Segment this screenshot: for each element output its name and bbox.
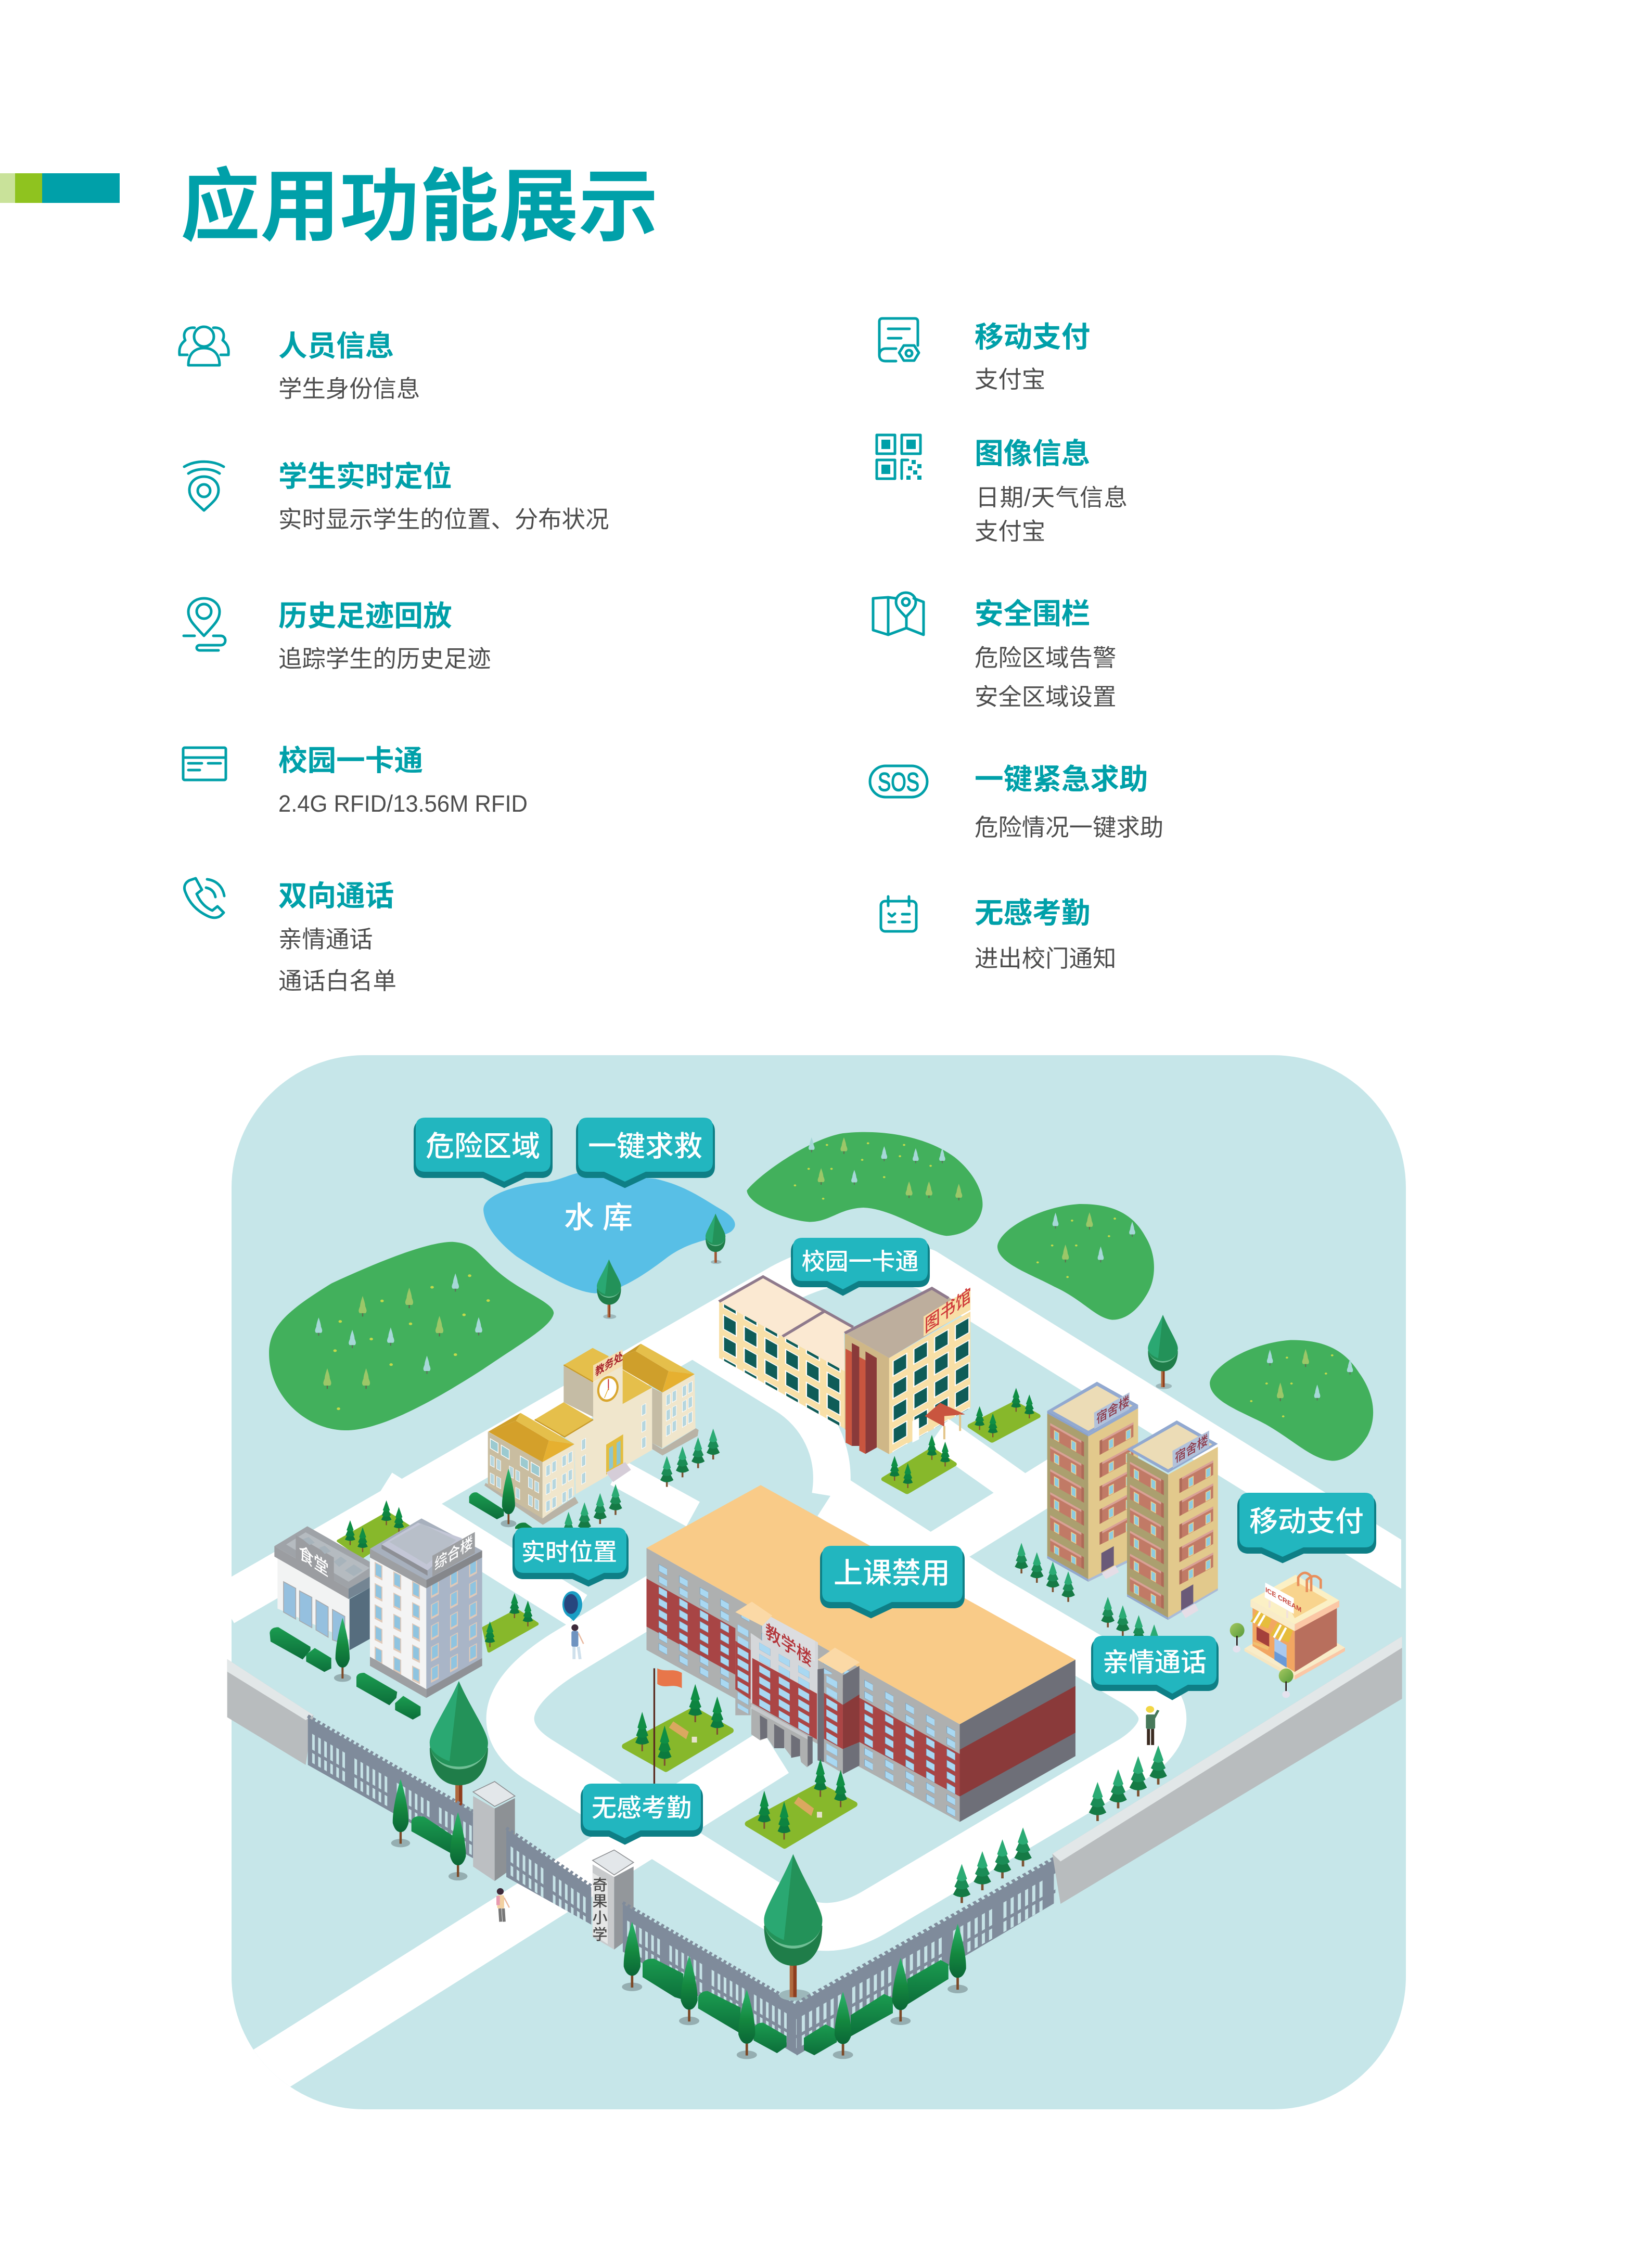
item: 安全围栏 [975,598,1116,710]
lawn: right [1210,1340,1373,1461]
label: 校园一卡通 [793,1238,928,1293]
trees on right lawn [1250,1349,1353,1417]
flag garden [625,1684,731,1769]
icon: QR code [877,435,921,480]
item: 双向通话: 通话白名单 [278,968,396,994]
building: academic office [484,1344,699,1525]
item: 无感考勤: 无感考勤 [975,897,1090,929]
icon: attendance calendar [881,896,916,931]
header accent bar [0,173,120,203]
icon: safety fence map [873,593,924,635]
fence: lower left section [623,1903,798,2055]
item: 安全围栏: 安全区域设置 [975,684,1116,710]
label: 上课禁用 [822,1546,963,1616]
building: library [719,1277,970,1454]
sign: academic office: 教务处 [595,1350,623,1379]
title: 应用功能展示 [181,162,658,251]
big tree: corner [764,1854,822,2001]
item: 人员信息: 学生身份信息 [278,376,420,402]
item: 历史足迹回放: 历史足迹回放 [278,600,452,632]
trees: dormitory front left [1015,1543,1075,1602]
school name: vertical text [592,1877,608,1943]
item: 移动支付: 支付宝 [975,366,1045,393]
label: 上课禁用: 上课禁用 [834,1557,950,1590]
item: 一键紧急求助 [975,763,1163,841]
item: 校园一卡通: 2.4G RFID/13.56M RFID [278,790,528,817]
reservoir lake [483,1172,735,1293]
building: canteen [274,1526,370,1650]
fence: left section [308,1716,473,1858]
item: 图像信息: 日期/天气信息 [976,484,1128,511]
sign: teaching block: 教学楼 [765,1620,812,1671]
item: 学生实时定位: 实时显示学生的位置、分布状况 [278,506,609,533]
fence: gate section [506,1828,591,1925]
roads [224,1261,1415,2076]
item: 图像信息: 图像信息 [975,438,1090,470]
feature list: right column [870,318,1163,972]
sign: dormitory 2: 宿舍楼 [1175,1432,1208,1466]
icon: people [180,327,228,365]
label: 移动支付: 移动支付 [1249,1505,1364,1538]
garden: right of complex building [484,1593,537,1651]
trees: dormitory front [1101,1597,1161,1655]
icon: SOS: SOS [878,767,919,797]
person on phone [1146,1706,1158,1745]
big tree: gate left [430,1681,488,1818]
person at gate [496,1888,509,1921]
item: 历史足迹回放 [278,600,491,672]
trees: library front garden [890,1435,950,1488]
trees and hedge: academic office [469,1429,720,1543]
shop sign text: ICE CREAM [1265,1586,1301,1614]
garden: library front [884,1450,954,1492]
label: 水库: 水 库 [564,1201,633,1235]
item: 图像信息 [975,438,1128,545]
item: 校园一卡通: 校园一卡通 [278,745,423,777]
fence: lower right section [797,1857,1055,2056]
item: 无感考勤: 进出校门通知 [975,945,1116,972]
item: 人员信息 [278,330,420,402]
school name: vertical text: 果 [592,1893,608,1910]
tree: lake right [706,1214,725,1264]
hedges and cypress: canteen front [270,1618,420,1720]
lawn: upper right [997,1204,1154,1320]
label: 无感考勤 [583,1784,701,1842]
wall: left [227,1659,313,1765]
entrance block [735,1602,860,1774]
trees on top lawn [794,1137,962,1200]
hedges and cypress: front fence [622,1921,968,2059]
building: teaching block [647,1485,1075,1822]
tree: between lawns [1148,1315,1178,1389]
hedges and cypress: fence left [391,1779,467,1880]
icon: phone [184,878,224,918]
lawn: left [269,1242,554,1430]
item: 一键紧急求助: 危险情况一键求助 [975,814,1163,841]
label: 一键求救 [578,1118,713,1186]
building: dormitory 2 [1127,1420,1218,1620]
item: 安全围栏: 安全围栏 [975,598,1090,630]
item: 历史足迹回放: 追踪学生的历史足迹 [278,646,491,672]
item: 学生实时定位 [278,460,609,533]
garden: library right [970,1388,1038,1440]
building: dormitory 1 [1047,1382,1138,1582]
item: 双向通话: 亲情通话 [278,926,373,953]
label: 实时位置 [515,1528,626,1584]
label: 亲情通话: 亲情通话 [1103,1648,1207,1677]
item: 人员信息: 人员信息 [278,330,394,362]
shop: ice cream [1230,1573,1345,1698]
sign: library: 图书馆 [925,1284,971,1337]
trees on upper right lawn [1036,1212,1135,1278]
label: 亲情通话 [1093,1636,1216,1698]
icon: map pin with trail [184,598,225,650]
label: 无感考勤: 无感考勤 [592,1795,691,1822]
item: 双向通话 [278,880,396,994]
garden: lower [748,1759,854,1846]
school name: vertical text: 小 [592,1910,608,1927]
gate post: school name [593,1850,634,1950]
label: 校园一卡通: 校园一卡通 [801,1248,919,1275]
person with location pin [562,1591,583,1659]
item: 图像信息: 支付宝 [975,518,1045,545]
wall: right [1052,1636,1402,1904]
item: 校园一卡通 [278,745,528,817]
trees: road right [1089,1746,1167,1821]
sign: dormitory 1: 宿舍楼 [1096,1393,1130,1427]
label: 危险区域 [416,1118,550,1186]
label: 实时位置: 实时位置 [521,1539,617,1566]
lawn: top centre [747,1132,982,1236]
icon: campus card [183,748,226,780]
building: complex building [370,1518,482,1698]
item: 移动支付 [975,321,1090,393]
flag [654,1668,682,1784]
garden: behind canteen [338,1500,409,1557]
item: 双向通话: 双向通话 [278,880,394,912]
label: 危险区域: 危险区域 [426,1130,540,1162]
sign: complex building: 综合楼 [434,1534,473,1574]
tree: lake front [597,1260,621,1319]
sign: canteen: 食堂 [299,1542,329,1581]
label: 移动支付 [1239,1493,1374,1561]
trees: fence right [953,1827,1032,1903]
item: 无感考勤 [975,897,1116,972]
label: 一键求救: 一键求救 [588,1130,702,1162]
feature list: left column [180,327,609,994]
school name: vertical text: 奇 [592,1877,608,1894]
icon: location signal [184,462,224,510]
panel: campus map background [232,1055,1406,2109]
gate post: left [473,1782,515,1881]
item: 一键紧急求助: 一键紧急求助 [975,763,1148,796]
school name: vertical text: 学 [592,1926,608,1943]
item: 学生实时定位: 学生实时定位 [278,460,452,493]
trees on left lawn [315,1273,490,1410]
item: 安全围栏: 危险区域告警 [975,645,1116,671]
item: 移动支付: 移动支付 [975,321,1090,353]
icon: payment ledger [879,318,919,361]
